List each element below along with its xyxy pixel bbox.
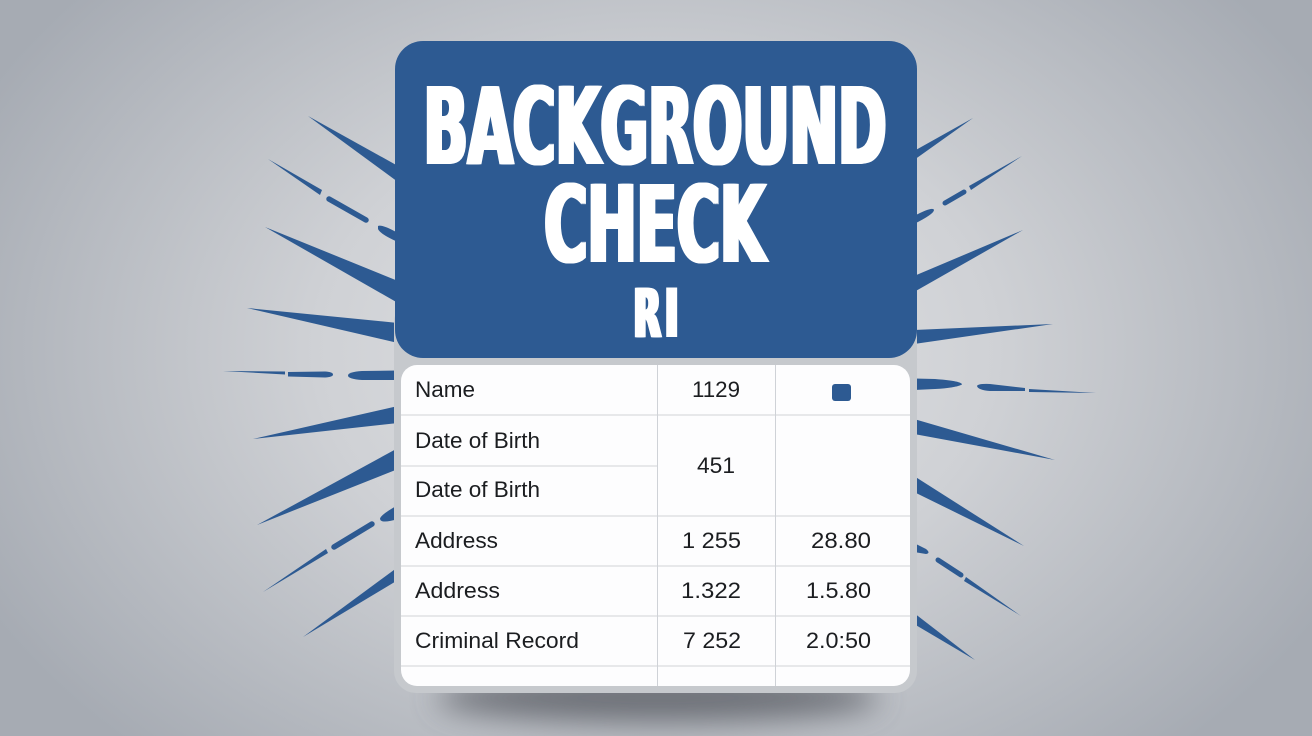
- row: name: 1129: [692, 377, 740, 402]
- row: address two: Address: [415, 578, 500, 603]
- row: address one: 28.80: [811, 528, 871, 553]
- row: address two: 1.5.80: [806, 578, 871, 603]
- table sheet: [401, 365, 910, 686]
- row: address two: [415, 578, 871, 603]
- row: address one: [415, 528, 871, 553]
- heading line: check: CHECK: [544, 164, 766, 288]
- row: date of birth: Date of Birth: [415, 477, 540, 502]
- row: name: Name: [415, 377, 475, 402]
- row: criminal record: 2.0:50: [806, 628, 871, 653]
- title: [424, 66, 886, 354]
- heading line: RI: RI: [634, 275, 682, 354]
- row: address one: Address: [415, 528, 498, 553]
- blue header: [395, 41, 917, 358]
- row: date of birth: 451: [697, 453, 735, 478]
- table grid: [401, 365, 910, 686]
- heading line: background: BACKGROUND: [424, 66, 886, 190]
- panel shadow: [436, 673, 880, 723]
- row: address two: 1.322: [681, 578, 741, 603]
- row: address one: 1 255: [682, 528, 741, 553]
- icon: blue square: [832, 384, 851, 401]
- row: criminal record: 7 252: [683, 628, 741, 653]
- right burst rays: [914, 118, 1096, 660]
- left burst rays: [223, 116, 398, 637]
- row: date of birth: Date of Birth: [415, 428, 540, 453]
- data table: [401, 365, 910, 686]
- grey card: [394, 300, 917, 693]
- row: criminal record: Criminal Record: [415, 628, 579, 653]
- row: name: [415, 377, 740, 402]
- row: date of birth: [415, 428, 735, 502]
- row: criminal record: [415, 628, 871, 653]
